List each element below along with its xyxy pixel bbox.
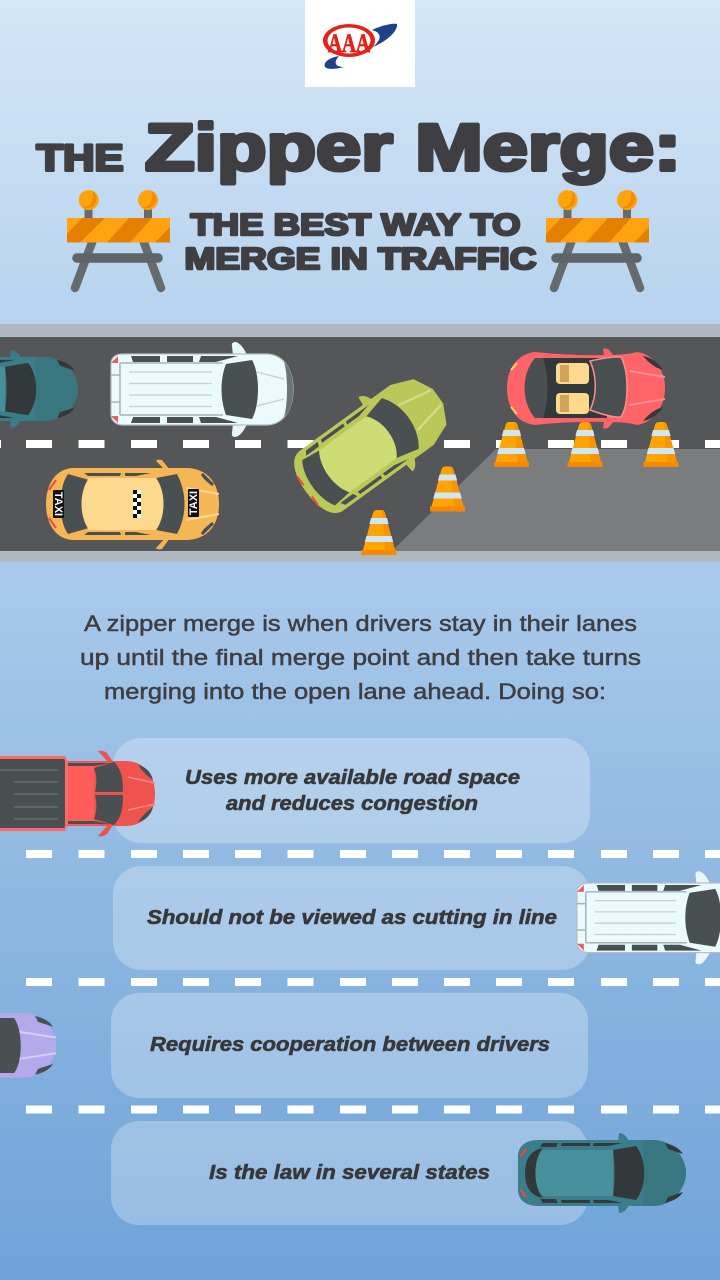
icon: right road barricade [546,190,649,288]
car: white van [111,342,293,437]
intro text: A zipper merge is when drivers stay in their lanes [84,611,637,636]
lane dividers [26,850,720,1114]
intro text [80,611,641,704]
intro text: merging into the open lane ahead. Doing so: [104,679,606,704]
car: white van lane two [577,871,720,964]
logo: AAA [305,0,415,87]
traffic cones [362,422,678,555]
taxi signs: TAXI [52,492,64,516]
car: teal lane four [518,1133,686,1213]
card: road space: and reduces congestion [226,793,478,815]
car: green merging [279,359,465,529]
card: law [111,1121,588,1225]
closed lane [392,449,720,551]
card: cooperation: Requires cooperation between drivers [150,1034,550,1056]
taxi signs [52,489,200,518]
card: cooperation [111,993,588,1098]
road illustration [0,324,720,562]
car: red convertible [507,348,665,429]
title: THE [36,138,124,178]
car: yellow taxi [46,460,219,549]
taxi signs: TAXI [188,491,200,515]
card: law: Is the law in several states [209,1162,490,1184]
title [36,110,681,184]
card: cutting in line: Should not be viewed as cutting in line [147,907,557,929]
card: road space: Uses more available road space [185,767,520,789]
taxi checker [133,490,141,518]
subtitle: THE BEST WAY TO [190,207,520,242]
car: teal top left [0,350,78,428]
intro text: up until the final merge point and then take turns [80,645,641,670]
subtitle: MERGE IN TRAFFIC [184,241,536,276]
car: purple [0,1006,56,1085]
car: red pickup [0,751,155,836]
card: cutting in line [113,866,590,970]
card: road space [113,738,590,843]
icon: left road barricade [67,190,170,288]
subtitle [184,207,536,276]
logo: AAA: AAA [328,29,370,58]
title: Zipper Merge: [145,110,681,184]
